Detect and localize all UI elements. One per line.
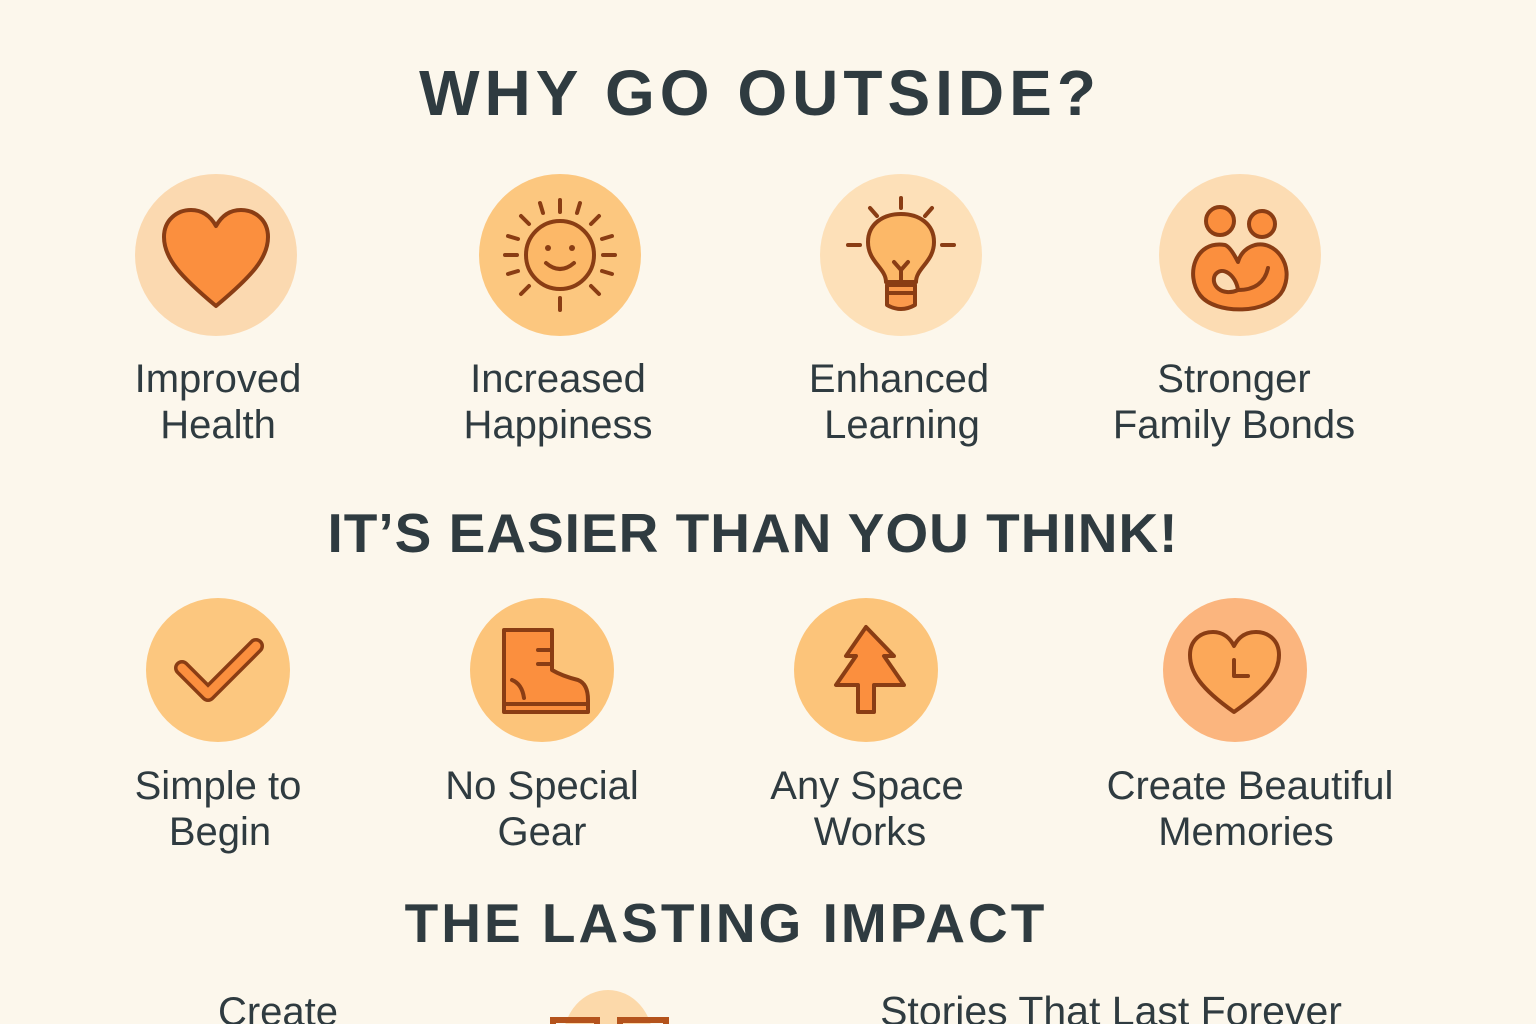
label: Health [160, 403, 276, 447]
icon: family hug [1159, 174, 1321, 336]
heading: lasting impact: THE LASTING IMPACT [405, 892, 1047, 954]
label: Works [814, 810, 926, 854]
label: Increased [470, 357, 646, 401]
icon: tree [794, 598, 938, 742]
label: Enhanced [809, 357, 989, 401]
item: improved health [135, 174, 301, 447]
label: Begin [169, 810, 271, 854]
item: create memories [1107, 598, 1393, 854]
label: Memories [1158, 810, 1334, 854]
item: no special gear [445, 598, 639, 854]
item: family bonds [1113, 174, 1355, 447]
label: Gear [498, 810, 586, 854]
item: enhanced learning [809, 174, 989, 447]
item: increased happiness [463, 174, 653, 447]
icon: boot [470, 598, 614, 742]
label: Learning [824, 403, 980, 447]
label: Any Space [770, 764, 964, 808]
label: Create Beautiful [1107, 764, 1393, 808]
title: WHY GO OUTSIDE? [419, 57, 1101, 129]
label: Happiness [463, 403, 653, 447]
label: No Special [445, 764, 639, 808]
label: Improved [135, 357, 301, 401]
label: Family Bonds [1113, 403, 1355, 447]
icon: check [146, 598, 290, 742]
icon: lightbulb [820, 174, 982, 336]
icon: sun [479, 174, 641, 336]
icon: bottom partial [553, 990, 666, 1024]
label: Stronger [1157, 357, 1311, 401]
label: Simple to [135, 764, 301, 808]
item: simple to begin [135, 598, 301, 854]
item: any space works [770, 598, 964, 854]
heading: easier: IT’S EASIER THAN YOU THINK! [327, 502, 1179, 564]
icon: heart clock [1163, 598, 1307, 742]
icon: heart [135, 174, 297, 336]
